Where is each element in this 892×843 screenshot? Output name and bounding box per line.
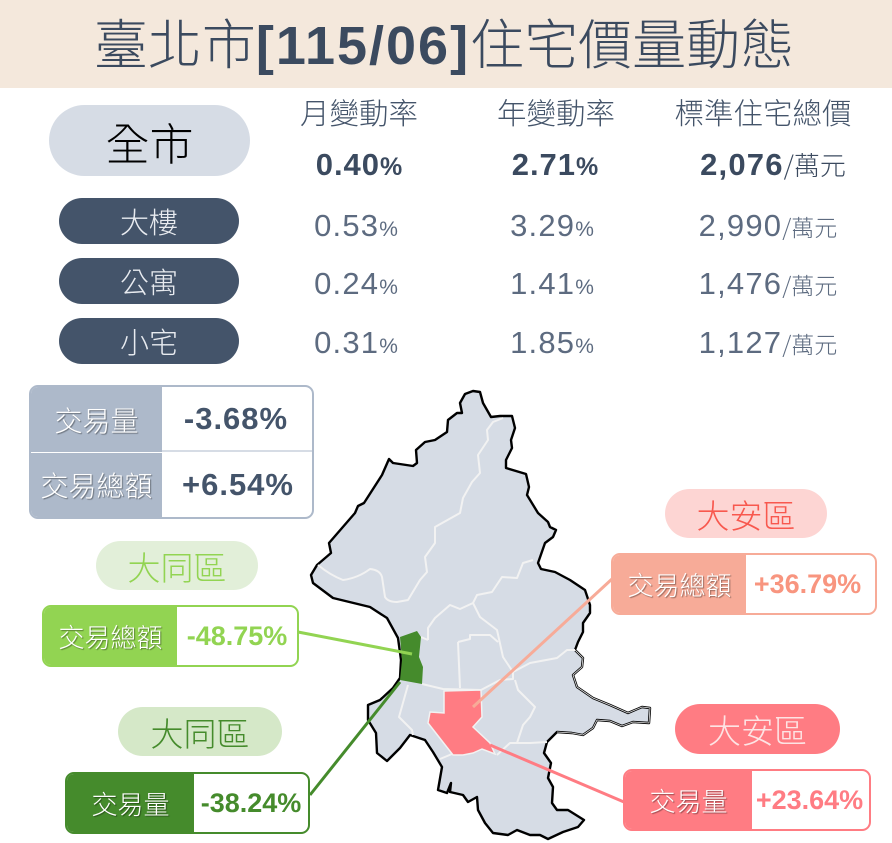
label: 交易總額 bbox=[627, 566, 732, 602]
category pill: small unit: 小宅 bbox=[120, 320, 178, 362]
district pill: Datong value: 大同區 bbox=[128, 542, 226, 590]
label bbox=[44, 607, 177, 665]
column header: yearly change: 年變動率 bbox=[497, 91, 615, 133]
district pill: Datong volume: 大同區 bbox=[150, 708, 250, 756]
category pill: whole city bbox=[49, 105, 250, 176]
category pill: high-rise bbox=[59, 198, 239, 244]
category pill: whole city: 全市 bbox=[106, 108, 194, 172]
transaction value label bbox=[31, 453, 162, 517]
small unit monthly: 0.31% bbox=[314, 325, 398, 360]
leader line: Da'an value bbox=[473, 579, 612, 707]
panel: Da'an value bbox=[611, 553, 877, 615]
column header: monthly change: 月變動率 bbox=[300, 91, 418, 133]
label bbox=[613, 555, 746, 613]
label bbox=[67, 774, 194, 832]
panel: city transaction summary bbox=[29, 385, 314, 519]
district: Da'an bbox=[428, 690, 495, 755]
district pill: Da'an volume: 大安區 bbox=[708, 705, 807, 753]
district: Datong bbox=[400, 631, 423, 684]
label bbox=[625, 771, 752, 829]
value: +36.79% bbox=[754, 568, 861, 598]
leader line: Datong value bbox=[298, 632, 412, 654]
whole city yearly: 2.71% bbox=[512, 147, 598, 182]
city outline bbox=[311, 391, 650, 839]
whole city monthly: 0.40% bbox=[316, 147, 402, 182]
river highlight along south-east edge bbox=[557, 650, 650, 735]
transaction volume value bbox=[162, 387, 314, 452]
column header: standard total price: 標準住宅總價 bbox=[674, 91, 852, 133]
panel: Da'an volume bbox=[623, 769, 871, 831]
label: 交易總額 bbox=[58, 618, 162, 654]
value: -38.24% bbox=[201, 788, 301, 818]
high-rise price: 2,990/萬元 bbox=[699, 208, 837, 243]
high-rise yearly: 3.29% bbox=[510, 208, 594, 243]
district borders bbox=[318, 418, 575, 759]
category pill: apartment bbox=[59, 258, 239, 304]
value: -48.75% bbox=[187, 620, 287, 650]
category pill: apartment: 公寓 bbox=[120, 260, 178, 302]
title: 臺北市[115/06]住宅價量動態 bbox=[94, 1, 794, 80]
transaction volume label bbox=[31, 387, 162, 452]
apartment price: 1,476/萬元 bbox=[699, 266, 837, 301]
district pill: Da'an value: 大安區 bbox=[696, 490, 796, 538]
small unit price: 1,127/萬元 bbox=[699, 325, 837, 360]
transaction value value: +6.54% bbox=[182, 467, 294, 502]
district pill: Da'an value bbox=[665, 489, 827, 538]
high-rise monthly: 0.53% bbox=[314, 208, 398, 243]
leader line: Da'an volume bbox=[490, 745, 624, 802]
label: 交易量 bbox=[91, 784, 170, 822]
transaction volume value: -3.68% bbox=[184, 400, 288, 436]
district pill: Datong value bbox=[96, 541, 258, 590]
category pill: high-rise: 大樓 bbox=[120, 200, 178, 242]
title banner bbox=[0, 0, 892, 88]
label: 交易量 bbox=[649, 782, 728, 818]
whole city price: 2,076/萬元 bbox=[700, 146, 846, 183]
transaction value label: 交易總額 bbox=[40, 465, 152, 505]
value: +23.64% bbox=[756, 784, 863, 814]
district pill: Datong volume bbox=[118, 707, 282, 756]
small unit yearly: 1.85% bbox=[510, 325, 594, 360]
district pill: Da'an volume bbox=[675, 704, 840, 754]
apartment monthly: 0.24% bbox=[314, 266, 398, 301]
category pill: small unit bbox=[59, 318, 239, 364]
transaction volume label: 交易量 bbox=[54, 400, 138, 440]
panel: Datong value bbox=[42, 605, 299, 667]
leader line: Datong volume bbox=[310, 682, 400, 795]
apartment yearly: 1.41% bbox=[510, 266, 594, 301]
panel: Datong volume bbox=[65, 772, 310, 834]
